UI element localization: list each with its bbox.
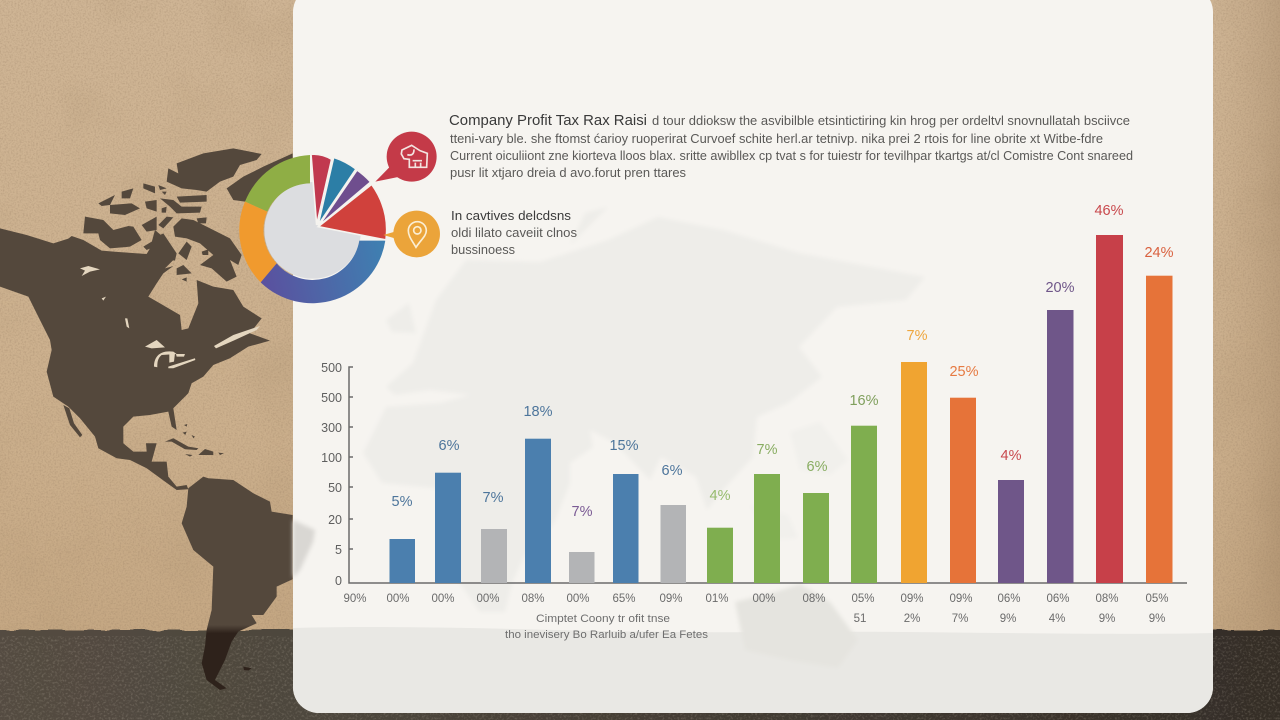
bar value labels: 20% [1045, 280, 1075, 296]
x-axis labels: 08% [1095, 593, 1119, 605]
bar value labels: 16% [849, 393, 879, 409]
bar chart [321, 203, 1187, 641]
bar value labels: 46% [1094, 203, 1124, 219]
x-axis labels: 00% [476, 593, 500, 605]
segment: blue [261, 241, 385, 303]
Great Lakes and inland water [80, 266, 260, 368]
wedge: teal [318, 157, 356, 225]
wedge: crimson [311, 154, 332, 225]
x-axis labels: 00% [386, 593, 410, 605]
x-axis labels: 09% [949, 593, 973, 605]
inner disc [264, 182, 361, 279]
chart caption [505, 613, 709, 641]
intro line 3: Current oiculiiont zne kiorteva lloos blax. sritte awibllex cp tvat s for tuiestr for tevilhpar tkartgs at/cl Comistre Cont snareed [450, 149, 1133, 163]
Falkland Islands [243, 667, 252, 671]
Baffin Island [173, 218, 242, 282]
chart caption: Cimptet Coony tr ofit tnse [536, 613, 670, 625]
bar value labels: 25% [949, 364, 979, 380]
x-axis labels: 65% [612, 593, 636, 605]
x-axis labels: 4% [1049, 613, 1065, 625]
x-axis labels: 90% [343, 593, 367, 605]
x-axis labels: 7% [952, 613, 968, 625]
callout text: incentives [451, 209, 577, 257]
callout text: incentives: bussinoess [451, 243, 515, 257]
intro line 4: pusr lit xtjaro dreia d avo.forut pren ttares [450, 166, 686, 180]
Cuba and Caribbean [165, 424, 224, 457]
x-axis labels: 08% [521, 593, 545, 605]
x-axis labels: 06% [1046, 593, 1070, 605]
Arctic islands [98, 183, 207, 232]
bar value labels: 7% [907, 328, 928, 344]
x-axis labels [343, 593, 1169, 625]
x-axis labels: 05% [851, 593, 875, 605]
icon: orange bubble with location pin [383, 211, 440, 257]
Greenland [227, 153, 293, 202]
x-axis labels: 06% [997, 593, 1021, 605]
bars [390, 235, 1172, 583]
bar value labels: 18% [523, 404, 553, 420]
bar value labels: 15% [609, 438, 639, 454]
northern peninsulas [143, 233, 208, 282]
bar value labels: 5% [392, 494, 413, 510]
x-axis labels: 9% [1000, 613, 1016, 625]
bar value labels [392, 203, 1174, 520]
y-axis labels: 100 [321, 451, 342, 465]
callout text: incentives: oldi lilato caveiit clnos [451, 226, 577, 240]
chart axes [349, 367, 1187, 583]
x-axis labels: 01% [705, 593, 729, 605]
segment: orange [239, 202, 277, 282]
x-axis labels: 05% [1145, 593, 1169, 605]
wedge: purple [319, 170, 371, 226]
Baja California [63, 405, 82, 437]
chart caption: tho inevisery Bo Rarluib a/ufer Ea Fetes [505, 629, 709, 641]
x-axis labels: 08% [802, 593, 826, 605]
y-axis labels: 500 [321, 391, 342, 405]
title: Company Profit Tax Rax Raisi [449, 113, 647, 129]
x-axis labels: 51 [854, 613, 866, 625]
callout text: incentives: In cavtives delcdsns [451, 209, 571, 223]
bar value labels: 7% [757, 442, 778, 458]
x-axis labels: 00% [431, 593, 455, 605]
x-axis labels: 9% [1099, 613, 1115, 625]
x-axis labels: 09% [659, 593, 683, 605]
y-axis labels: 300 [321, 421, 342, 435]
bar value labels: 4% [710, 488, 731, 504]
y-axis labels: 500 [321, 361, 342, 375]
Ellesmere [167, 148, 262, 192]
bar value labels: 6% [807, 459, 828, 475]
panel: main infographic card [293, 0, 1213, 713]
North and Central America [0, 228, 270, 490]
wedge: red [318, 184, 387, 240]
y-axis labels: 5 [335, 543, 342, 557]
intro line 2: tteni-vary ble. she ftomst ćarioy ruoperirat Curvoef schite herl.ar tetnivp. nika prei 2 rtois for line obrite xt Witbe-fdre [450, 132, 1103, 146]
x-axis labels: 00% [752, 593, 776, 605]
intro line 1: d tour ddioksw the asvibilble etsintictiring kin hrog per ordeltvl snovnullatah bsciivce [652, 114, 1130, 128]
segment: green [245, 155, 310, 212]
watermark: world map [293, 207, 925, 668]
donut chart [239, 154, 387, 303]
map: the Americas [0, 148, 293, 690]
x-axis labels: 00% [566, 593, 590, 605]
x-axis labels: 9% [1149, 613, 1165, 625]
x-axis labels: 2% [904, 613, 920, 625]
bar value labels: 4% [1001, 448, 1022, 464]
icon: red bubble with house [375, 132, 437, 182]
y-axis labels [321, 361, 342, 588]
heading and intro text [449, 113, 1133, 180]
bar value labels: 6% [662, 463, 683, 479]
band: ground seen through the card [293, 627, 1213, 713]
bar value labels: 24% [1144, 245, 1174, 261]
Banks and Victoria islands [83, 217, 142, 248]
bar value labels: 7% [483, 490, 504, 506]
bar value labels: 7% [572, 504, 593, 520]
y-axis labels: 50 [328, 481, 342, 495]
x-axis labels: 09% [900, 593, 924, 605]
bar value labels: 6% [439, 438, 460, 454]
y-axis labels: 20 [328, 513, 342, 527]
y-axis labels: 0 [335, 574, 342, 588]
South America [182, 477, 293, 690]
